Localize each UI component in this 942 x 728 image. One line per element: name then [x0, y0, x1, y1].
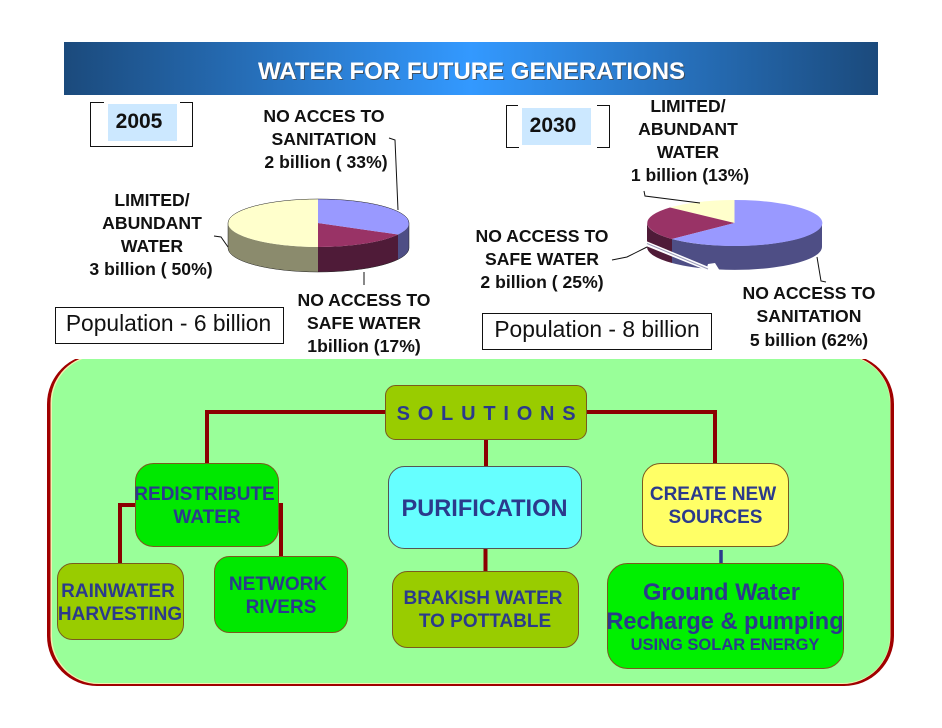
label: no access to safe water 2005: SAFE WATER — [307, 313, 421, 333]
label: no access to sanitation 2030: SANITATION — [757, 306, 861, 326]
label: limited abundant water 2030: LIMITED/ — [650, 96, 726, 116]
title banner: WATER FOR FUTURE GENERATIONS — [258, 58, 685, 85]
box: create new sources: SOURCES — [669, 507, 762, 528]
box: ground water recharge — [606, 564, 844, 668]
box: ground water recharge: Recharge & pumping — [606, 609, 844, 635]
year badge 2005 — [90, 102, 192, 146]
box: brakish water to pottable — [392, 572, 578, 648]
label: no access to sanitation 2005: SANITATION — [272, 129, 376, 149]
box: create new sources: CREATE NEW — [650, 484, 776, 505]
box: rainwater harvesting: HARVESTING — [58, 604, 182, 625]
label: no access to sanitation 2005: NO ACCES TO — [263, 106, 385, 126]
title banner — [64, 42, 878, 95]
box: redistribute water — [134, 464, 278, 546]
leader lines 2030 — [612, 191, 826, 282]
label: limited abundant water 2005: LIMITED/ — [114, 190, 190, 210]
label: limited abundant water 2005: WATER — [121, 236, 183, 256]
population box 2030 — [482, 314, 712, 350]
label: no access to sanitation 2030: NO ACCESS TO — [743, 283, 875, 303]
box: create new sources — [642, 464, 788, 546]
label: limited abundant water 2005: ABUNDANT — [102, 213, 202, 233]
panel: solutions — [47, 354, 894, 686]
box: purification — [388, 466, 582, 548]
pie chart 2030 — [646, 200, 822, 271]
label: no access to safe water 2030: 2 billion ( 25%) — [480, 272, 604, 292]
label: limited abundant water 2030: 1 billion (13%) — [631, 165, 749, 185]
box: network rivers: RIVERS — [246, 597, 316, 618]
box: network rivers: NETWORK — [229, 574, 327, 595]
box: ground water recharge: Ground Water — [643, 580, 800, 606]
population box 2005: Population - 6 billion — [66, 310, 271, 336]
box: rainwater harvesting — [58, 564, 184, 640]
label: no access to safe water 2005: NO ACCESS TO — [298, 290, 430, 310]
box: solutions heading — [386, 386, 586, 440]
box: network rivers — [214, 556, 348, 632]
label: limited abundant water 2030: ABUNDANT — [638, 119, 738, 139]
year badge 2005: 2005 — [116, 110, 163, 133]
box: rainwater harvesting: RAINWATER — [61, 581, 175, 602]
population box 2005 — [56, 308, 284, 344]
label: no access to sanitation 2005: 2 billion ( 33%) — [264, 152, 388, 172]
pie chart 2005 — [228, 199, 409, 272]
box: solutions heading: SOLUTIONS — [397, 403, 583, 425]
connectors — [120, 412, 721, 571]
label: limited abundant water 2005: 3 billion ( 50%) — [89, 259, 213, 279]
label: no access to safe water 2030: SAFE WATER — [485, 249, 599, 269]
year badge 2030 — [506, 106, 610, 148]
label: no access to sanitation 2030: 5 billion (62%) — [750, 330, 868, 350]
box: redistribute water: WATER — [173, 507, 241, 528]
title banner: WATER FOR FUTURE GENERATIONS — [259, 59, 686, 86]
year badge 2030: 2030 — [530, 114, 576, 137]
box: brakish water to pottable: TO POTTABLE — [419, 611, 551, 632]
label: no access to safe water 2005: 1billion (17%) — [307, 336, 421, 356]
leader lines 2005 — [214, 138, 398, 285]
box: brakish water to pottable: BRAKISH WATER — [403, 588, 563, 609]
box: redistribute water: REDISTRIBUTE — [134, 484, 275, 505]
box: purification: PURIFICATION — [401, 496, 568, 522]
label: no access to safe water 2030: NO ACCESS TO — [476, 226, 608, 246]
label: limited abundant water 2030: WATER — [657, 142, 719, 162]
box: ground water recharge: USING SOLAR ENERGY — [631, 636, 819, 654]
population box 2030: Population - 8 billion — [494, 316, 700, 342]
